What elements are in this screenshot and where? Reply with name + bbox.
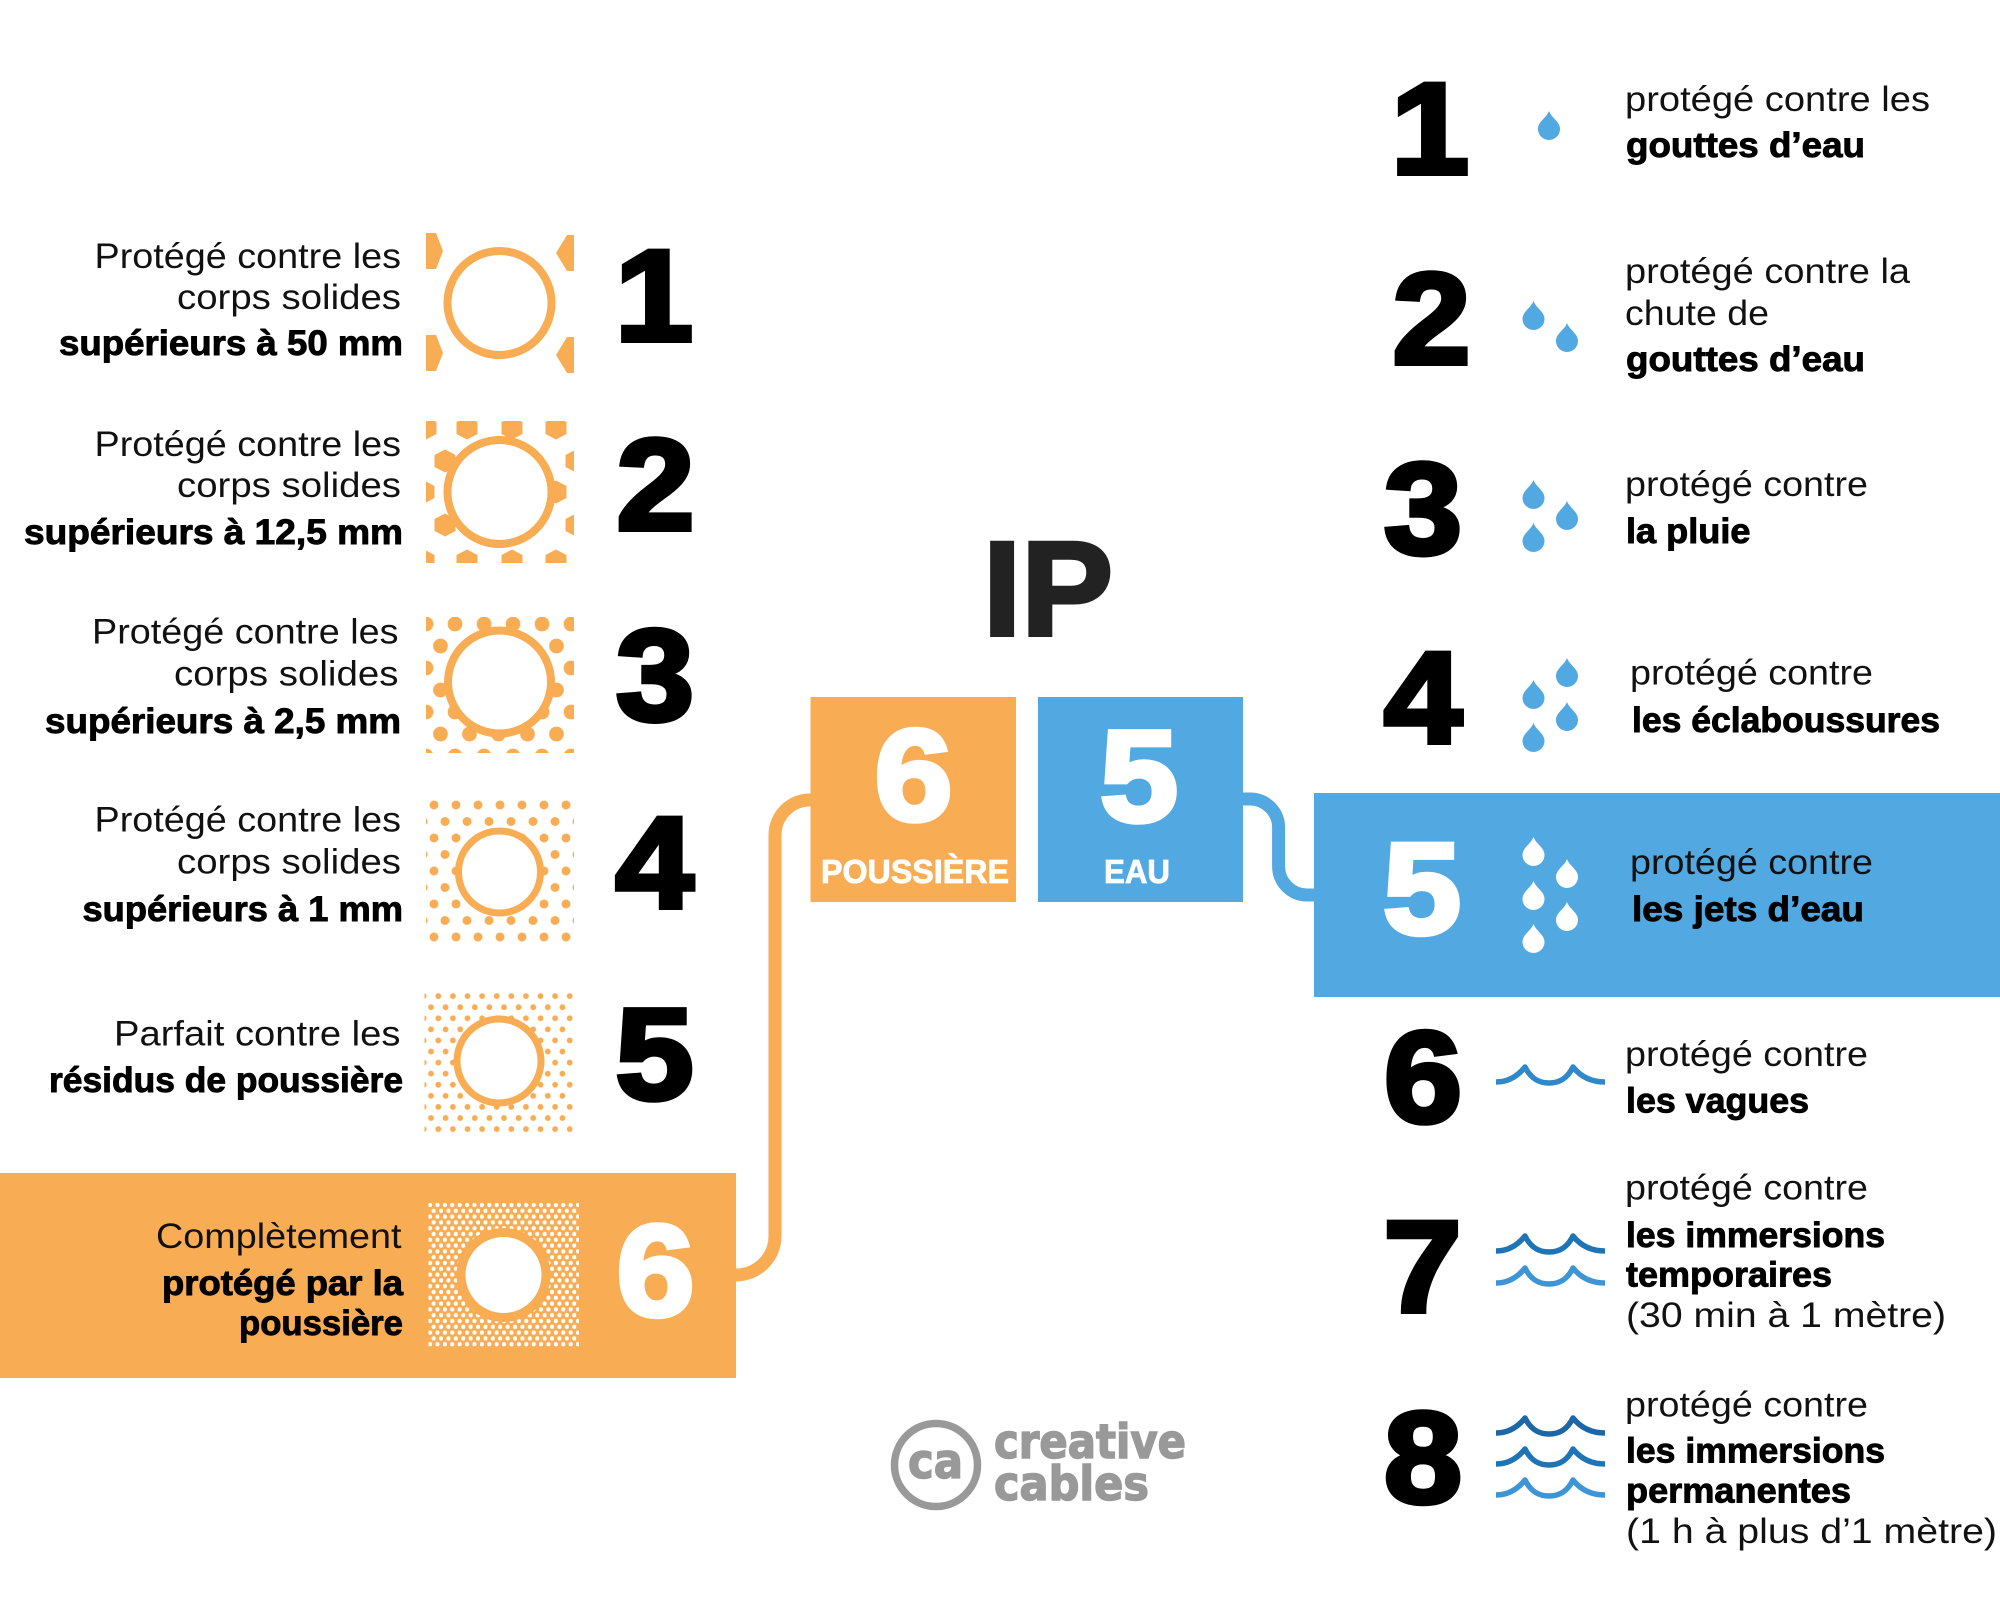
panel: water digit box (1038, 697, 1243, 902)
text: level 2 description: corps solides (177, 466, 401, 505)
icon: two waves (1496, 1236, 1605, 1284)
icon: dust 2.5 mm (426, 617, 574, 753)
connector: water box to level 5 band (1243, 799, 1316, 895)
text: water level 8 description: permanentes (1626, 1472, 1851, 1510)
digit: 3: 3 (1384, 436, 1462, 581)
text: water level 4 description (1630, 654, 1940, 740)
text: water level 7 description: protégé contre (1625, 1168, 1868, 1208)
icon: dust 1 mm (426, 798, 574, 942)
digit: 8: 8 (1384, 1385, 1462, 1530)
text: water level 3 description: protégé contre (1625, 465, 1868, 504)
panel: water level 2 (1392, 246, 1911, 391)
text: level 4 description: corps solides (177, 842, 401, 882)
text: level 3 description: supérieurs à 2,5 mm (45, 702, 401, 741)
text: water level 2 description: chute de (1625, 294, 1769, 333)
text: water level 7 description (1625, 1168, 1946, 1335)
text: level 6 description (156, 1217, 404, 1343)
text: level 4 description: Protégé contre les (94, 800, 401, 840)
icon: dust 12.5 mm (426, 421, 574, 563)
panel: water level 3 (1384, 436, 1868, 581)
text: water level 5 description: protégé contre (1630, 843, 1873, 882)
text: level 5 description: résidus de poussière (49, 1061, 403, 1100)
icon: five drops (1522, 837, 1578, 953)
text: water level 6 description: protégé contre (1625, 1035, 1868, 1074)
text: water level 8 description (1625, 1386, 1997, 1551)
logo: creative cables (894, 1415, 1186, 1512)
text: level 5 description: Parfait contre les (114, 1014, 400, 1054)
digit: 4: 4 (1384, 625, 1462, 770)
text: water level 1 description: gouttes d’eau (1626, 126, 1865, 165)
text: level 2 description (24, 425, 403, 552)
text: level 6 description: poussière (239, 1304, 403, 1343)
digit: 6: 6 (1384, 1005, 1462, 1150)
text: water level 5 description (1630, 843, 1873, 929)
text: water level 6 description (1625, 1035, 1868, 1120)
text: water level 7 description: temporaires (1626, 1256, 1832, 1294)
digit: 5: 5 (615, 982, 694, 1127)
panel: water level 6 (1384, 1005, 1868, 1150)
text: water level 7 description: (30 min à 1 mètre) (1626, 1296, 1946, 1335)
panel: dust level 4 (82, 790, 694, 942)
panel: dust digit box (810, 697, 1016, 902)
logo: creative cables: cables (994, 1457, 1149, 1512)
icon: four drops (1522, 658, 1578, 752)
panel: dust level 6 band (0, 1173, 736, 1378)
icon: dust 50 mm (426, 233, 574, 373)
text: water level 4 description: les éclaboussures (1632, 701, 1940, 740)
digit: 2: 2 (616, 412, 695, 557)
text: water level 6 description: les vagues (1626, 1082, 1809, 1120)
logo: creative cables: creative (994, 1415, 1186, 1470)
icon: two drops (1522, 301, 1578, 352)
text: water level 8 description: (1 h à plus d’1 mètre) (1626, 1512, 1997, 1551)
panel: dust level 2 (24, 421, 692, 563)
panel: water level 4 (1384, 625, 1940, 770)
icon: three drops (1522, 480, 1578, 552)
connector: dust box to level 6 band (736, 800, 812, 1275)
panel: water level 7 (1383, 1168, 1946, 1339)
panel: dust level 5 (49, 982, 694, 1133)
digit: 3: 3 (616, 603, 694, 748)
text: water level 4 description: protégé contre (1630, 654, 1873, 692)
text: water level 3 description: la pluie (1626, 512, 1750, 551)
panel: dust level 1 (59, 223, 693, 373)
text: water level 1 description: protégé contre les (1625, 80, 1930, 119)
text: level 3 description: Protégé contre les (92, 612, 399, 652)
text: level 6 description: Complètement (156, 1217, 402, 1256)
panel: dust level 3 (45, 603, 694, 753)
icon: one drop (1538, 111, 1560, 140)
logo: creative cables: ca (908, 1434, 963, 1490)
text: water level 2 description: gouttes d’eau (1626, 340, 1865, 379)
text: water level 2 description (1625, 252, 1911, 379)
text: water level 8 description: protégé contre (1625, 1386, 1868, 1424)
text: water level 3 description (1625, 465, 1868, 551)
text: level 2 description: Protégé contre les (94, 425, 401, 464)
label: POUSSIÈRE: POUSSIÈRE (821, 853, 1009, 890)
panel: water level 8 (1384, 1385, 1997, 1551)
digit: 2: 2 (1392, 246, 1471, 391)
digit: 1: 1 (615, 223, 693, 368)
text: level 2 description: supérieurs à 12,5 mm (24, 513, 403, 552)
text: water level 8 description: les immersions (1626, 1432, 1885, 1470)
text: level 5 description (49, 1014, 403, 1100)
panel: water level 1 (1391, 56, 1930, 201)
text: level 1 description: corps solides (177, 278, 401, 317)
text: level 1 description (59, 237, 403, 363)
title: IP: IP (983, 515, 1113, 664)
digit: 1: 1 (1391, 56, 1469, 201)
digit: 6: 6 (874, 703, 953, 848)
digit: 5: 5 (1100, 704, 1178, 849)
digit: 4: 4 (615, 790, 694, 935)
text: level 3 description (45, 612, 401, 741)
icon: total dust protection (428, 1203, 579, 1348)
icon: dust residue (424, 993, 574, 1133)
text: water level 5 description: les jets d’eau (1632, 890, 1864, 929)
text: water level 1 description (1625, 80, 1930, 165)
digit: 6: 6 (616, 1198, 695, 1343)
text: level 6 description: protégé par la (162, 1264, 404, 1303)
icon: three waves (1496, 1418, 1605, 1496)
text: water level 2 description: protégé contre la (1625, 252, 1911, 291)
label: EAU: EAU (1104, 853, 1170, 890)
panel: water level 5 band (1314, 793, 2000, 997)
text: water level 7 description: les immersions (1626, 1216, 1885, 1255)
digit: 7: 7 (1383, 1194, 1462, 1339)
digit: 5: 5 (1383, 816, 1461, 961)
text: level 1 description: supérieurs à 50 mm (59, 324, 403, 363)
icon: one wave (1496, 1067, 1605, 1083)
text: level 4 description: supérieurs à 1 mm (82, 890, 403, 929)
text: level 1 description: Protégé contre les (94, 237, 401, 276)
text: level 3 description: corps solides (174, 654, 398, 694)
text: level 4 description (82, 800, 403, 929)
